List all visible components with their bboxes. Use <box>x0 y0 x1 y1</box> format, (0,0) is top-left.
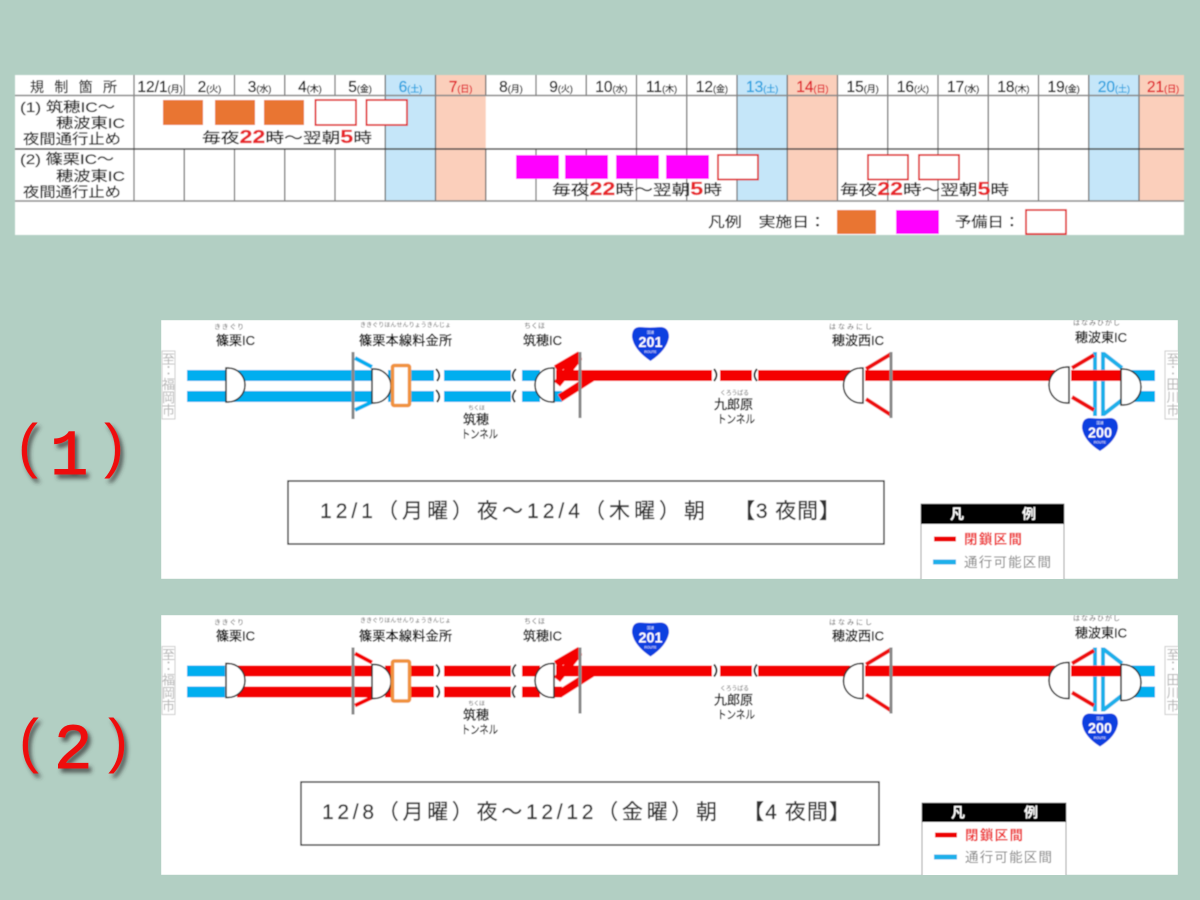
tunnel name: 九郎原トンネル: トンネル <box>717 708 755 722</box>
heading: (2): ( <box>19 707 39 774</box>
tunnel name: 九郎原トンネル: トンネル <box>717 413 755 426</box>
table header: location column: 規 制 箇 所 <box>30 79 117 95</box>
IC name: 穂波東IC <box>1073 614 1127 640</box>
table header: dates: 7(日) <box>449 79 472 96</box>
IC name: 篠栗IC: 篠栗IC <box>216 628 255 644</box>
table header: dates <box>137 79 1179 96</box>
tunnel name: 筑穂トンネル: ちくほ <box>468 700 485 708</box>
IC name: 篠栗IC: ききぐり <box>214 323 244 331</box>
table header: dates: 12/1(月) <box>137 79 183 96</box>
origin direction label: Fukuoka: 岡 <box>162 686 175 700</box>
route sign 201: ROUTE <box>644 350 657 354</box>
table header: dates: 20(土) <box>1098 79 1130 96</box>
row 1 label <box>20 99 125 147</box>
road legend: 通行可能区間 <box>964 555 1051 570</box>
table header: dates: 13(土) <box>746 79 778 96</box>
row 1 closure days <box>163 100 407 125</box>
IC name: 筑穂IC: 筑穂IC <box>523 628 562 644</box>
row 2 reserve hours note: 毎夜 22 時～翌朝 5時 <box>840 179 1009 199</box>
tunnel name: 筑穂トンネル <box>461 700 498 736</box>
tunnel name: 九郎原トンネル: 九郎原 <box>714 397 753 412</box>
destination direction label: Tagawa: 川 <box>1166 390 1180 405</box>
toll gate <box>392 366 410 406</box>
IC name: 筑穂IC: ちくほ <box>524 618 545 626</box>
destination direction label: Tagawa: 市 <box>1166 403 1180 418</box>
IC name: 穂波東IC: はなみひがし <box>1073 614 1120 622</box>
road legend: 通行可能区間 <box>965 850 1052 865</box>
origin direction label: Fukuoka <box>162 646 175 714</box>
origin direction label: Fukuoka: 市 <box>162 698 175 714</box>
IC name: 篠栗IC: 篠栗IC <box>216 333 255 348</box>
route sign 200 <box>1082 418 1118 451</box>
toll gate name: 篠栗本線料金所 <box>359 333 452 348</box>
IC name: 穂波西IC: はなみにし <box>829 323 872 331</box>
road legend <box>922 803 1066 883</box>
panel: closure schedule table <box>15 75 1184 235</box>
date caption box: 12/8（月曜）夜～12/12（金曜）朝 <box>322 801 717 824</box>
row 2 label <box>20 151 125 200</box>
table header: dates: 15(月) <box>846 79 879 96</box>
row 1 hours note: 毎夜 22 時～翌朝 5時 <box>202 127 372 147</box>
date caption box: 【3 夜間】 <box>734 500 840 523</box>
IC name: 穂波東IC: はなみひがし <box>1073 318 1120 327</box>
route sign 200: 200 <box>1088 720 1112 737</box>
table header: dates: 12(金) <box>696 79 728 96</box>
toll gate name: ききぐりほんせんりょうきんじょ <box>360 322 451 329</box>
heading: (1): ) <box>104 412 124 479</box>
tunnel name: 筑穂トンネル: 筑穂 <box>463 708 489 722</box>
IC name: 篠栗IC: ききぐり <box>214 618 244 626</box>
date caption box: 【4 夜間】 <box>743 801 850 824</box>
IC name: 篠栗IC <box>214 323 255 348</box>
row 1 label: 夜間通行止め <box>23 131 121 147</box>
interchange symbols <box>226 662 1141 700</box>
table header: dates: 17(水) <box>947 79 979 96</box>
table header: dates: 19(金) <box>1047 79 1080 96</box>
IC name: 穂波東IC: 穂波東IC <box>1075 330 1127 345</box>
row 2 label: 夜間通行止め <box>23 184 121 200</box>
heading: (1) <box>18 412 124 494</box>
route sign 201 <box>632 327 669 361</box>
tunnel name: 筑穂トンネル: トンネル <box>461 428 498 441</box>
table header: dates: 10(水) <box>595 79 628 96</box>
route sign 200: 国道 <box>1096 716 1104 720</box>
IC name: 筑穂IC <box>523 322 562 348</box>
origin direction label: Fukuoka <box>162 351 175 419</box>
toll gate name: 篠栗本線料金所 <box>359 628 452 644</box>
destination direction label: Tagawa: 田 <box>1166 377 1180 392</box>
origin direction label: Fukuoka: ： <box>162 658 175 674</box>
tunnel name: 九郎原トンネル <box>714 389 755 426</box>
road legend: 閉鎖区間 <box>965 827 1023 843</box>
date caption box <box>288 481 884 544</box>
IC name: 穂波東IC: 穂波東IC <box>1075 626 1127 640</box>
interchange symbols <box>226 367 1141 405</box>
IC name: 筑穂IC: 筑穂IC <box>523 333 562 348</box>
origin direction label: Fukuoka: 至 <box>162 648 175 662</box>
heading: (2) <box>19 707 128 788</box>
row 2 label: 穂波東IC <box>56 168 125 184</box>
road legend: 例 <box>1024 804 1038 820</box>
table header: dates: 3(水) <box>248 79 271 96</box>
closed section roads (red) <box>556 354 1121 415</box>
origin direction label: Fukuoka: 市 <box>162 403 175 418</box>
destination direction label: Tagawa: 至 <box>1166 648 1180 662</box>
IC name: 穂波西IC: はなみにし <box>829 618 872 626</box>
tunnel portals <box>436 369 757 402</box>
tunnel name: 九郎原トンネル <box>714 684 755 722</box>
row 2 closure days <box>516 155 959 180</box>
heading: (2): ) <box>108 707 128 774</box>
panel: route diagram (1) <box>161 318 1183 584</box>
table header: dates: 9(火) <box>549 79 573 96</box>
table header: dates: 16(火) <box>897 79 929 96</box>
route sign 200: ROUTE <box>1094 736 1107 740</box>
row 2 hours note: 毎夜 22 時～翌朝 5時 <box>552 179 722 199</box>
origin direction label: Fukuoka: 至 <box>162 352 175 367</box>
panel: route diagram (2) <box>161 614 1183 883</box>
tunnel name: 筑穂トンネル: トンネル <box>461 724 498 736</box>
toll gate name <box>359 322 452 348</box>
route sign 201: 国道 <box>647 625 654 630</box>
IC name: 篠栗IC <box>214 618 255 644</box>
heading: (1): 1 <box>50 422 88 494</box>
route sign 200: 200 <box>1088 424 1112 442</box>
IC name: 穂波西IC: 穂波西IC <box>832 628 884 644</box>
tunnel name: 筑穂トンネル: 筑穂 <box>463 412 489 427</box>
table header: dates: 14(日) <box>796 79 829 96</box>
destination direction label: Tagawa: 田 <box>1166 672 1180 688</box>
date caption box: 12/1（月曜）夜～12/4（木曜）朝 <box>320 500 705 523</box>
IC name: 穂波西IC: 穂波西IC <box>832 333 884 348</box>
closed section roads (red) <box>237 650 1121 710</box>
route sign 201: ROUTE <box>644 646 657 650</box>
destination direction label: Tagawa: ： <box>1166 658 1180 674</box>
gantry bars <box>353 352 891 419</box>
destination direction label: Tagawa: ： <box>1166 363 1180 378</box>
tunnel name: 筑穂トンネル <box>461 405 498 441</box>
toll gate <box>392 661 410 701</box>
date caption box <box>301 782 879 845</box>
tunnel name: 九郎原トンネル: 九郎原 <box>714 692 753 708</box>
origin direction label: Fukuoka: 福 <box>162 377 175 392</box>
destination direction label: Tagawa: 市 <box>1166 698 1180 714</box>
IC name: 穂波西IC <box>829 323 884 348</box>
origin direction label: Fukuoka: 福 <box>162 672 175 688</box>
table header: dates: 21(日) <box>1147 79 1179 96</box>
tunnel name: 九郎原トンネル: くろうばる <box>720 684 749 692</box>
tunnel name: 筑穂トンネル: ちくほ <box>468 405 485 412</box>
road legend: 凡 <box>950 506 964 522</box>
table header: dates: 4(木) <box>298 79 322 96</box>
IC name: 筑穂IC: ちくほ <box>524 322 545 330</box>
table header: dates: 8(月) <box>499 79 523 96</box>
origin direction label: Fukuoka: ： <box>162 363 175 378</box>
open section roads (blue) <box>187 648 1155 712</box>
toll gate name <box>359 618 452 644</box>
IC name: 筑穂IC <box>523 618 562 644</box>
destination direction label: Tagawa <box>1164 350 1178 420</box>
schedule legend: 凡例 実施日： <box>708 214 826 230</box>
row 1 label: (1) 筑穂IC～ <box>20 99 115 115</box>
table header: dates: 18(木) <box>997 79 1030 96</box>
schedule legend <box>708 210 1066 234</box>
heading: (2): 2 <box>54 716 92 788</box>
open section roads (blue) <box>187 352 1155 416</box>
road legend: 例 <box>1022 506 1036 522</box>
road legend: 凡 <box>951 804 965 820</box>
route sign 201 <box>632 622 669 656</box>
route sign 201: 201 <box>638 630 662 646</box>
route sign 201: 201 <box>638 334 662 351</box>
IC name: 穂波西IC <box>829 618 884 644</box>
destination direction label: Tagawa: 至 <box>1166 352 1180 367</box>
toll gate name: ききぐりほんせんりょうきんじょ <box>360 618 451 624</box>
row 2 label: (2) 篠栗IC～ <box>20 151 114 167</box>
schedule legend: 予備日： <box>955 214 1020 230</box>
heading: (1): ( <box>18 412 38 479</box>
origin direction label: Fukuoka: 岡 <box>162 390 175 405</box>
road legend <box>921 504 1064 584</box>
route sign 201: 国道 <box>647 330 654 334</box>
gantry bars <box>353 648 891 714</box>
IC name: 穂波東IC <box>1073 320 1128 344</box>
route sign 200: ROUTE <box>1094 440 1107 444</box>
road legend: 閉鎖区間 <box>964 531 1022 547</box>
route sign 200: 国道 <box>1096 420 1104 425</box>
destination direction label: Tagawa: 川 <box>1166 686 1180 700</box>
row 1 label: 穂波東IC <box>56 115 125 131</box>
table header: dates: 2(火) <box>198 79 221 96</box>
table header: dates: 11(木) <box>646 79 677 96</box>
table header: dates: 6(土) <box>399 79 422 96</box>
route sign 200 <box>1082 714 1118 746</box>
tunnel name: 九郎原トンネル: くろうばる <box>720 389 749 397</box>
table header: dates: 5(金) <box>348 79 372 96</box>
destination direction label: Tagawa <box>1164 646 1178 716</box>
tunnel portals <box>436 664 757 698</box>
